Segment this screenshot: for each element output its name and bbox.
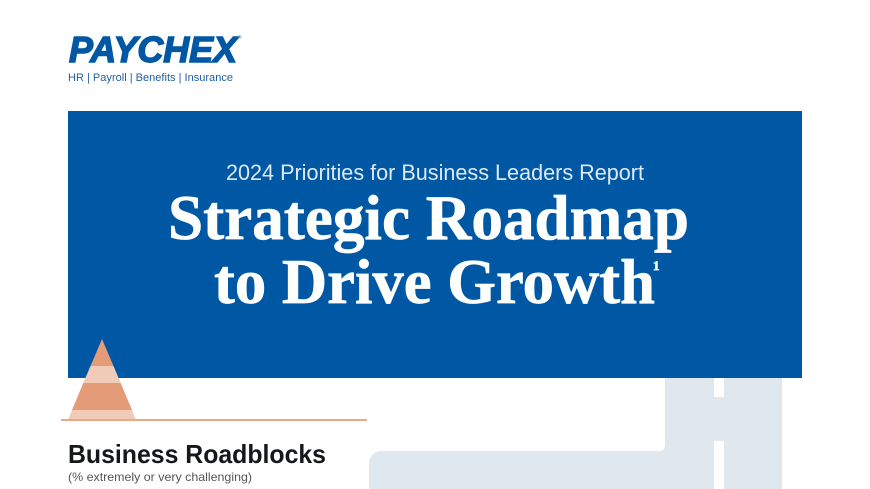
report subtitle: 2024 Priorities for Business Leaders Report xyxy=(226,160,644,185)
cone top band xyxy=(90,339,114,366)
section heading xyxy=(68,439,326,484)
icon: traffic cone xyxy=(68,339,136,419)
main title line 2: to Drive Growth xyxy=(214,246,655,317)
logo tagline: HR | Payroll | Benefits | Insurance xyxy=(68,72,233,84)
logo: Paychex xyxy=(68,29,242,84)
logo registered mark: ® xyxy=(238,34,242,41)
logo wordmark: PAYCHEX xyxy=(69,29,239,70)
heading note: (% extremely or very challenging) xyxy=(68,470,252,484)
road lane dash upper xyxy=(714,378,724,397)
cone third band xyxy=(72,383,132,410)
main title line 1: Strategic Roadmap xyxy=(168,182,689,253)
title banner xyxy=(68,111,802,378)
road illustration background xyxy=(369,378,782,489)
heading: Business Roadblocks: Business Roadblocks xyxy=(68,439,326,469)
footnote marker: 1 xyxy=(653,258,660,273)
section divider line xyxy=(61,419,367,421)
cone base band xyxy=(68,410,136,419)
cone second band xyxy=(83,366,121,383)
road lane dash lower xyxy=(714,441,724,489)
banner background xyxy=(68,111,802,378)
road shape xyxy=(369,378,782,489)
